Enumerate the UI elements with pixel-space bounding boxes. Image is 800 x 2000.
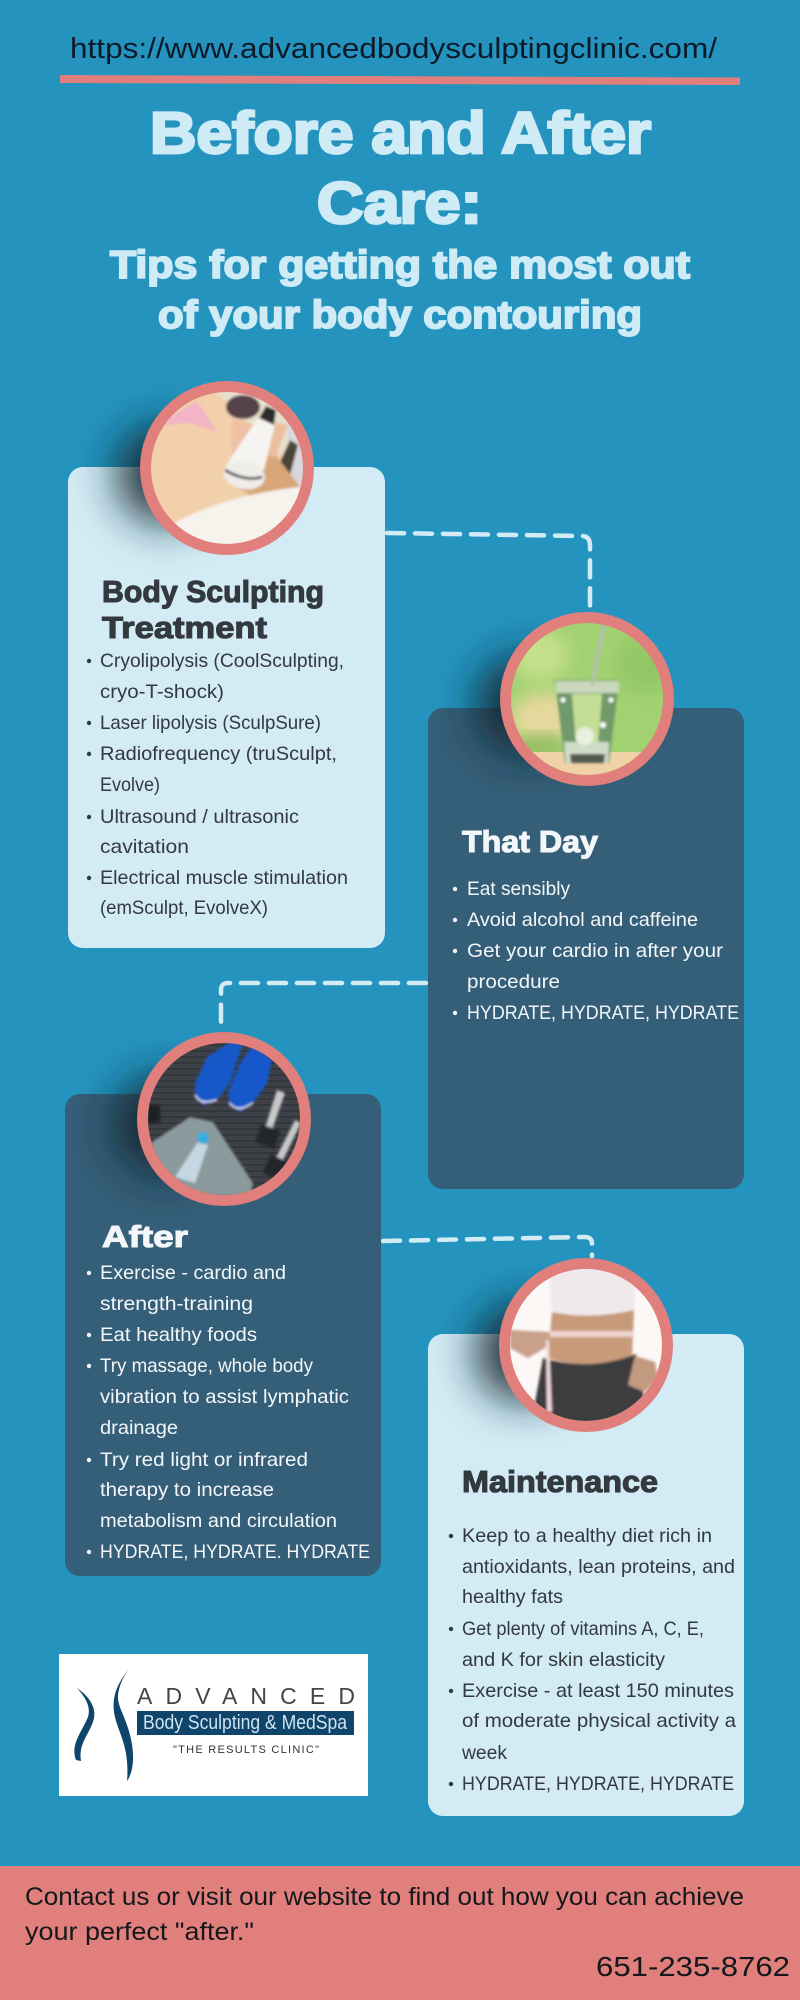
- heading: Treatment: [102, 610, 267, 645]
- after list: Try massage, whole body: [100, 1355, 313, 1377]
- phone number: 651-235-8762: [596, 1951, 790, 1982]
- logo: [59, 1654, 368, 1796]
- title: [110, 101, 690, 337]
- panel: that day: [428, 612, 744, 1189]
- divider bar: [60, 75, 740, 85]
- panel: after: [65, 1032, 381, 1576]
- after list: vibration to assist lymphatic: [100, 1386, 349, 1408]
- treatment list: Cryolipolysis (CoolSculpting,: [100, 650, 344, 672]
- title: Before and After: [150, 101, 651, 166]
- photo: glass of water: [500, 612, 675, 787]
- that day list: [453, 878, 739, 1024]
- after list: drainage: [100, 1417, 178, 1439]
- after list: HYDRATE, HYDRATE. HYDRATE: [100, 1541, 370, 1563]
- treatment list: (emSculpt, EvolveX): [100, 897, 268, 919]
- after list: metabolism and circulation: [100, 1510, 337, 1532]
- connector: that day to after: [221, 983, 426, 1030]
- maintenance list: week: [461, 1742, 507, 1764]
- treatment list: Laser lipolysis (SculpSure): [100, 712, 321, 734]
- panel: body sculpting treatment: [68, 380, 385, 948]
- call to action: your perfect "after.": [25, 1918, 254, 1946]
- treatment list: cryo-T-shock): [100, 681, 224, 703]
- that day list: procedure: [467, 971, 560, 993]
- photo: treatment device: [140, 380, 315, 570]
- maintenance list: of moderate physical activity a: [462, 1710, 736, 1732]
- after list: therapy to increase: [100, 1479, 274, 1501]
- title: Tips for getting the most out: [110, 244, 690, 287]
- card shadow: [475, 1302, 575, 1402]
- treatment list: [87, 650, 348, 919]
- that day list: Eat sensibly: [467, 878, 570, 900]
- heading: That Day: [462, 824, 599, 859]
- treatment list: Ultrasound / ultrasonic: [100, 806, 299, 828]
- panel: maintenance: [428, 1258, 744, 1816]
- maintenance list: Get plenty of vitamins A, C, E,: [462, 1618, 704, 1640]
- connector: treatment to that day: [387, 533, 590, 610]
- maintenance list: and K for skin elasticity: [462, 1649, 665, 1671]
- footer band: [0, 1866, 800, 2000]
- treatment list: Electrical muscle stimulation: [100, 867, 348, 889]
- that day list: Get your cardio in after your: [467, 940, 724, 962]
- title: of your body contouring: [158, 294, 642, 337]
- that day list: Avoid alcohol and caffeine: [467, 909, 698, 931]
- card shadow: [476, 655, 576, 755]
- treatment list: cavitation: [100, 836, 189, 858]
- website url: https://www.advancedbodysculptingclinic.com/: [70, 33, 718, 65]
- maintenance list: [449, 1525, 736, 1795]
- logo banner: [137, 1711, 354, 1735]
- connector: after to maintenance: [383, 1237, 592, 1256]
- call to action: [25, 1883, 744, 1946]
- call to action: Contact us or visit our website to find out how you can achieve: [25, 1883, 744, 1911]
- logo banner text: Body Sculpting & MedSpa: [143, 1712, 348, 1734]
- maintenance list: Keep to a healthy diet rich in: [462, 1525, 712, 1547]
- heading: After: [102, 1219, 188, 1254]
- title: Care:: [317, 171, 482, 236]
- after list: strength-training: [100, 1293, 253, 1315]
- after list: [87, 1262, 370, 1563]
- card shadow: [116, 424, 216, 524]
- maintenance list: HYDRATE, HYDRATE, HYDRATE: [462, 1773, 734, 1795]
- logo tagline: "THE RESULTS CLINIC": [173, 1744, 319, 1756]
- maintenance list: healthy fats: [462, 1586, 563, 1608]
- treatment list: Radiofrequency (truSculpt,: [100, 743, 337, 765]
- after list: Try red light or infrared: [100, 1449, 308, 1471]
- heading: Body Sculpting: [102, 574, 324, 609]
- heading: Maintenance: [462, 1464, 658, 1499]
- after list: Eat healthy foods: [100, 1324, 257, 1346]
- heading: [102, 574, 324, 645]
- treatment list: Evolve): [100, 774, 160, 796]
- logo body curves: [74, 1669, 133, 1781]
- card shadow: [114, 1075, 214, 1175]
- that day list: HYDRATE, HYDRATE, HYDRATE: [467, 1002, 739, 1024]
- photo: exercise gear: [137, 1032, 311, 1206]
- logo wordmark: ADVANCED: [137, 1683, 355, 1709]
- photo: waist measurement: [499, 1258, 675, 1435]
- maintenance list: Exercise - at least 150 minutes: [462, 1680, 734, 1702]
- after list: Exercise - cardio and: [100, 1262, 286, 1284]
- maintenance list: antioxidants, lean proteins, and: [462, 1556, 735, 1578]
